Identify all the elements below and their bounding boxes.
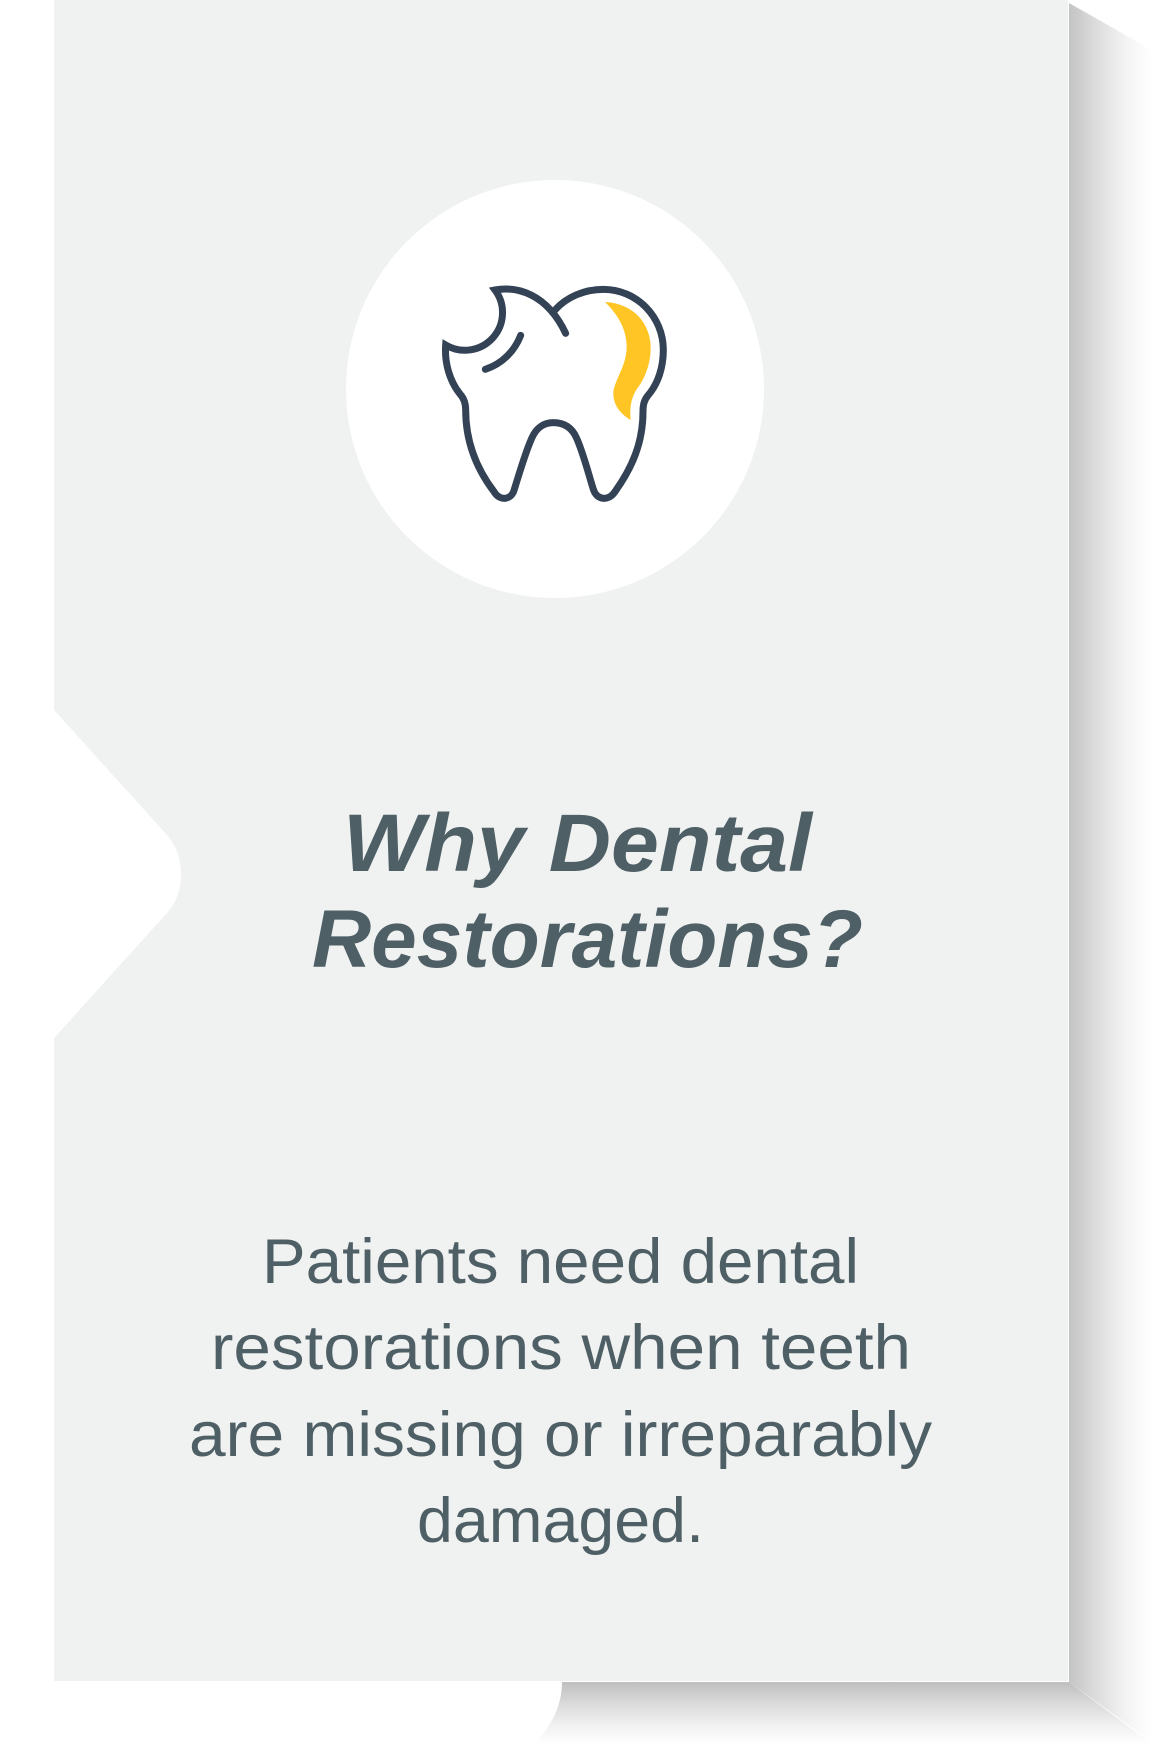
- body text: damaged.: [417, 1486, 704, 1556]
- body text: [189, 1227, 933, 1556]
- tooth outline: [445, 289, 663, 498]
- chip crack line: [485, 335, 521, 369]
- icon: white circle with damaged tooth: [346, 180, 764, 598]
- heading: [312, 798, 863, 985]
- drop shadow: bottom side: [535, 1682, 1152, 1744]
- body text: restorations when teeth: [211, 1313, 911, 1383]
- icon: tooth: [445, 289, 663, 498]
- body text: Patients need dental: [262, 1227, 859, 1297]
- tooth decay highlight: [605, 302, 651, 420]
- drop shadow: right side: [1069, 3, 1152, 1742]
- body text: are missing or irreparably: [189, 1400, 933, 1470]
- heading: Why Dental: [343, 798, 814, 889]
- heading: Restorations?: [312, 894, 863, 985]
